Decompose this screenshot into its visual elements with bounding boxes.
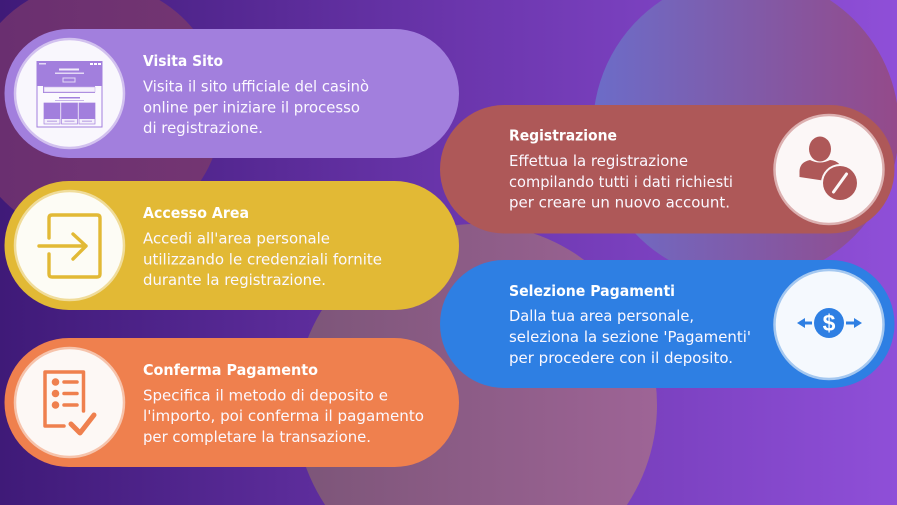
icon: dollar with arrows: [797, 308, 862, 338]
heading: Selezione Pagamenti: Selezione Pagamenti: [509, 282, 675, 300]
icon: checklist document: [45, 372, 94, 433]
heading: Accesso Area: Accesso Area: [143, 204, 249, 222]
panel: Accesso Area: [4, 181, 459, 310]
text: Registrazione body: per creare un nuovo account.: [509, 194, 730, 212]
heading: Visita Sito: Visita Sito: [143, 52, 223, 70]
heading: Conferma Pagamento: Conferma Pagamento: [143, 361, 318, 379]
text: Accesso Area body: utilizzando le credenziali fornite: [143, 250, 382, 268]
text: Selezione Pagamenti body: [509, 307, 751, 367]
text: Visita Sito body: [143, 78, 369, 137]
icon: dollar with arrows: $: [823, 310, 836, 336]
text: Accesso Area body: durante la registrazione.: [143, 271, 326, 289]
text: Selezione Pagamenti body: Dalla tua area personale,: [509, 307, 694, 325]
text: Registrazione body: [509, 152, 733, 212]
text: Conferma Pagamento body: Specifica il metodo di deposito e: [143, 386, 388, 404]
text: Conferma Pagamento body: per completare la transazione.: [143, 428, 371, 446]
text: Selezione Pagamenti body: seleziona la sezione 'Pagamenti': [509, 328, 751, 346]
panel: Registrazione: [440, 105, 894, 234]
text: Accesso Area body: [143, 230, 382, 289]
icon: website layout: [37, 62, 102, 127]
icon: login door arrow: [39, 215, 100, 277]
panel: Selezione Pagamenti: [440, 260, 894, 388]
text: Registrazione body: Effettua la registrazione: [509, 152, 688, 170]
text: Registrazione body: compilando tutti i dati richiesti: [509, 173, 733, 191]
text: Accesso Area body: Accedi all'area personale: [143, 230, 330, 248]
icon: user with pencil: [800, 136, 859, 202]
text: Conferma Pagamento body: l'importo, poi conferma il pagamento: [143, 407, 424, 425]
text: Visita Sito body: online per iniziare il processo: [143, 98, 360, 116]
text: Visita Sito body: Visita il sito ufficiale del casinò: [143, 78, 369, 96]
text: Conferma Pagamento body: [143, 386, 424, 446]
panel: Visita Sito: [4, 29, 459, 158]
text: Visita Sito body: di registrazione.: [143, 119, 263, 137]
heading: Registrazione: Registrazione: [509, 126, 617, 144]
text: Selezione Pagamenti body: per procedere con il deposito.: [509, 349, 733, 367]
panel: Conferma Pagamento: [4, 338, 459, 467]
